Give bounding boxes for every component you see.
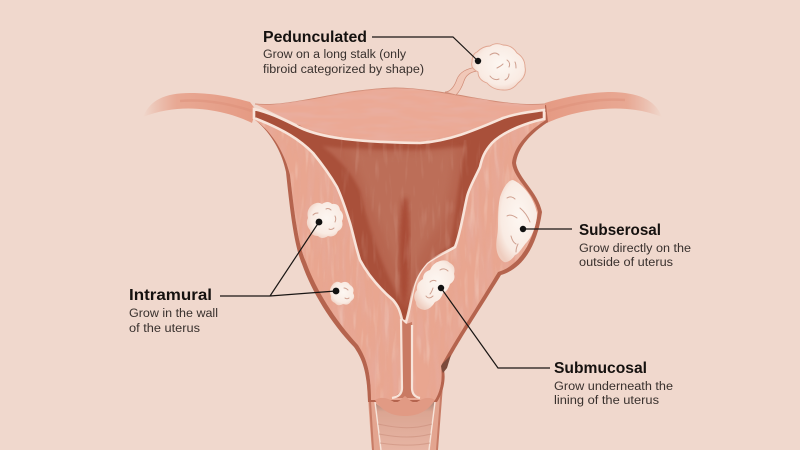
uterine outer wall	[254, 105, 548, 402]
fundus muscle	[255, 88, 545, 141]
label: Subserosal: Subserosal	[579, 222, 661, 239]
label: Submucosal	[438, 285, 673, 407]
subserosal fibroid	[496, 180, 537, 262]
label: Pedunculated: Pedunculated	[263, 29, 367, 46]
cavity lighter interior	[322, 140, 480, 320]
uterus illustration	[143, 44, 662, 450]
label: Pedunculated	[263, 29, 481, 76]
vaginal canal	[375, 401, 435, 450]
muscle fibre texture	[262, 122, 540, 398]
cervical canal	[392, 319, 418, 398]
uterine muscle wall	[255, 112, 546, 400]
label: Subserosal: outside of uterus	[579, 257, 673, 269]
submucosal fibroid	[414, 260, 454, 310]
intramural fibroid upper	[307, 202, 343, 238]
left fallopian tube	[143, 93, 256, 123]
intramural fibroid lower	[330, 282, 354, 305]
label: Subserosal	[520, 222, 691, 269]
right fallopian tube	[543, 92, 662, 123]
label: Intramural: Grow in the wall	[129, 308, 218, 320]
label: Intramural: of the uterus	[129, 323, 200, 335]
label: Pedunculated: fibroid categorized by shape)	[263, 64, 424, 76]
label: Intramural: Intramural	[129, 287, 212, 304]
label: Pedunculated: Grow on a long stalk (only	[263, 49, 406, 61]
pedunculated stalk	[445, 67, 477, 95]
label: Intramural	[129, 219, 339, 335]
pedunculated fibroid	[472, 44, 525, 90]
cavity lining	[254, 109, 544, 322]
label: Subserosal: Grow directly on the	[579, 243, 691, 255]
label: Submucosal: Grow underneath the	[554, 381, 673, 393]
label: Submucosal: Submucosal	[554, 360, 647, 377]
notch at cervix	[440, 355, 451, 373]
vagina outer wall	[366, 370, 444, 450]
cervix dome	[375, 396, 435, 416]
label: Submucosal: lining of the uterus	[554, 395, 659, 407]
